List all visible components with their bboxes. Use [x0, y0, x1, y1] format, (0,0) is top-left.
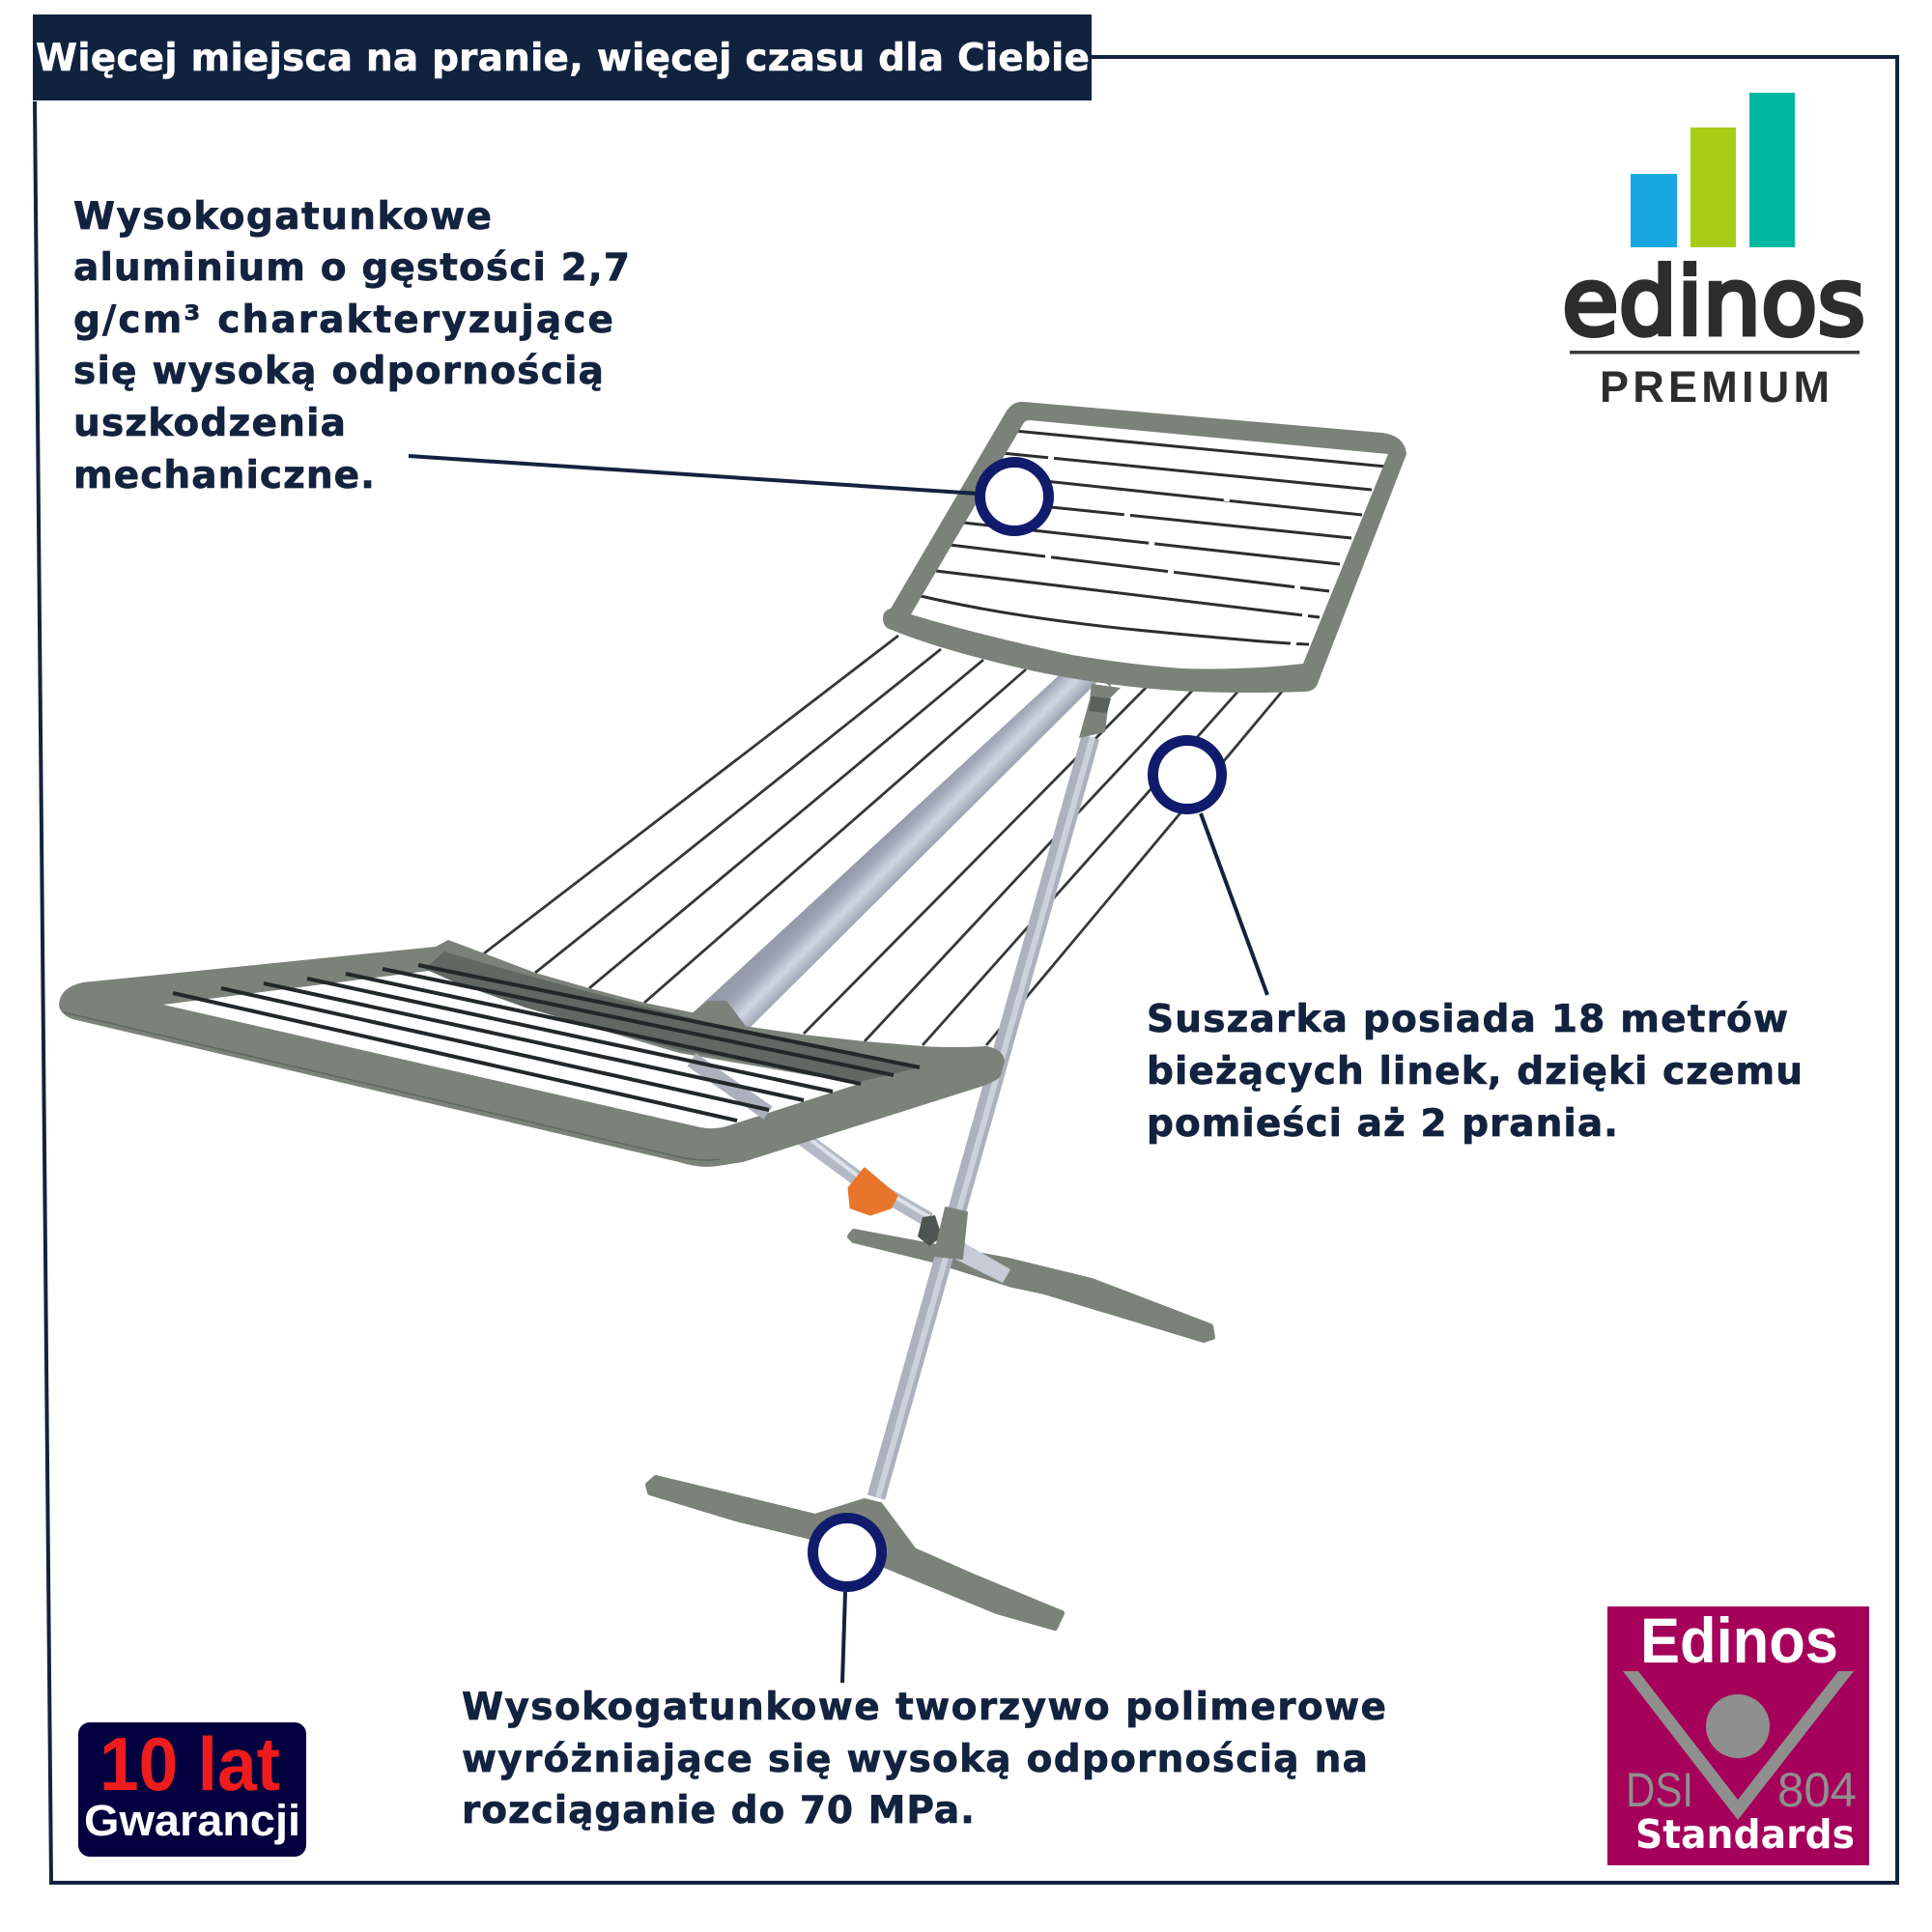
DSI label: DSI [1626, 1763, 1693, 1817]
lower frame shadow band [425, 952, 920, 1082]
drying rack product illustration [59, 402, 1406, 1628]
aluminium text [73, 195, 630, 497]
strut highlight [773, 1111, 929, 1217]
lower frame edge crease [64, 1012, 720, 1160]
long leg highlight [878, 737, 1093, 1497]
polymer text: rozciąganie do 70 MPa. [462, 1789, 975, 1833]
orange lock [849, 1169, 896, 1214]
lower frame [59, 940, 1005, 1167]
polymer text: Wysokogatunkowe tworzywo polimerowe [462, 1686, 1386, 1729]
polymer text [462, 1686, 1386, 1833]
logo wordmark: edinos [1562, 248, 1865, 356]
aluminium text: g/cm³ charakteryzujące [73, 298, 613, 342]
lines text: bieżących linek, dzięki czemu [1147, 1050, 1803, 1094]
marker circle [1153, 740, 1221, 810]
V mark [1623, 1671, 1854, 1820]
aluminium text: się wysoką odpornością [73, 350, 604, 393]
leader line [409, 456, 978, 494]
polymer text: wyróżniające się wysoką odpornością na [462, 1738, 1368, 1781]
title text: Więcej miejsca na pranie, więcej czasu dla Ciebie [36, 37, 1090, 80]
strut lower sleeve [949, 1238, 1010, 1283]
edinos premium logo [1562, 93, 1865, 412]
strut hinge [918, 1215, 942, 1246]
edinos standards badge [1607, 1605, 1869, 1865]
logo bar teal [1749, 93, 1795, 247]
lines text [1147, 998, 1803, 1146]
strut seen through frame [692, 1060, 768, 1113]
wire highlights [1045, 458, 1308, 644]
marker circle [813, 1519, 881, 1586]
logo rule [1570, 351, 1860, 354]
aluminium text: uszkodzenia [73, 402, 346, 445]
logo bar blue [1631, 174, 1677, 247]
callout: aluminium [73, 195, 1049, 531]
lower frame wires [173, 965, 920, 1121]
lower tube collar [688, 1001, 749, 1030]
title banner [33, 14, 1092, 100]
callout: lines length [1147, 740, 1803, 1146]
logo bar lime [1690, 128, 1736, 247]
lines text: Suszarka posiada 18 metrów [1147, 998, 1788, 1041]
leader line [842, 1592, 845, 1683]
long clothes lines [484, 636, 1287, 1045]
main tube [686, 667, 1101, 1043]
leg sleeve [934, 1208, 967, 1259]
strut leg [763, 1109, 929, 1220]
804 label: 804 [1777, 1763, 1857, 1817]
callout: polymer [462, 1519, 1386, 1833]
lines text: pomieści aż 2 prania. [1147, 1102, 1618, 1146]
connector dark holes [1089, 696, 1111, 713]
aluminium text: aluminium o gęstości 2,7 [73, 246, 630, 290]
marker circle [980, 462, 1049, 531]
upper connector [1079, 684, 1121, 738]
grey dot [1706, 1694, 1770, 1758]
warranty word: Gwarancji [84, 1796, 300, 1845]
aluminium text: mechaniczne. [73, 454, 375, 497]
connector neck [1079, 684, 1121, 738]
leader line [1201, 813, 1267, 995]
warranty years: 10 lat [99, 1721, 280, 1806]
rear foot [850, 1232, 1212, 1340]
front foot [648, 1478, 1062, 1628]
lower frame opening [163, 971, 859, 1128]
logo premium: PREMIUM [1600, 362, 1830, 412]
standards word: Standards [1635, 1811, 1855, 1858]
upper tube collar [1068, 658, 1111, 688]
aluminium text: Wysokogatunkowe [73, 195, 492, 239]
upper frame wires [921, 431, 1386, 644]
long leg [876, 737, 1091, 1497]
standards heading: Edinos [1640, 1605, 1838, 1676]
upper frame [883, 402, 1406, 693]
warranty badge [78, 1721, 306, 1857]
